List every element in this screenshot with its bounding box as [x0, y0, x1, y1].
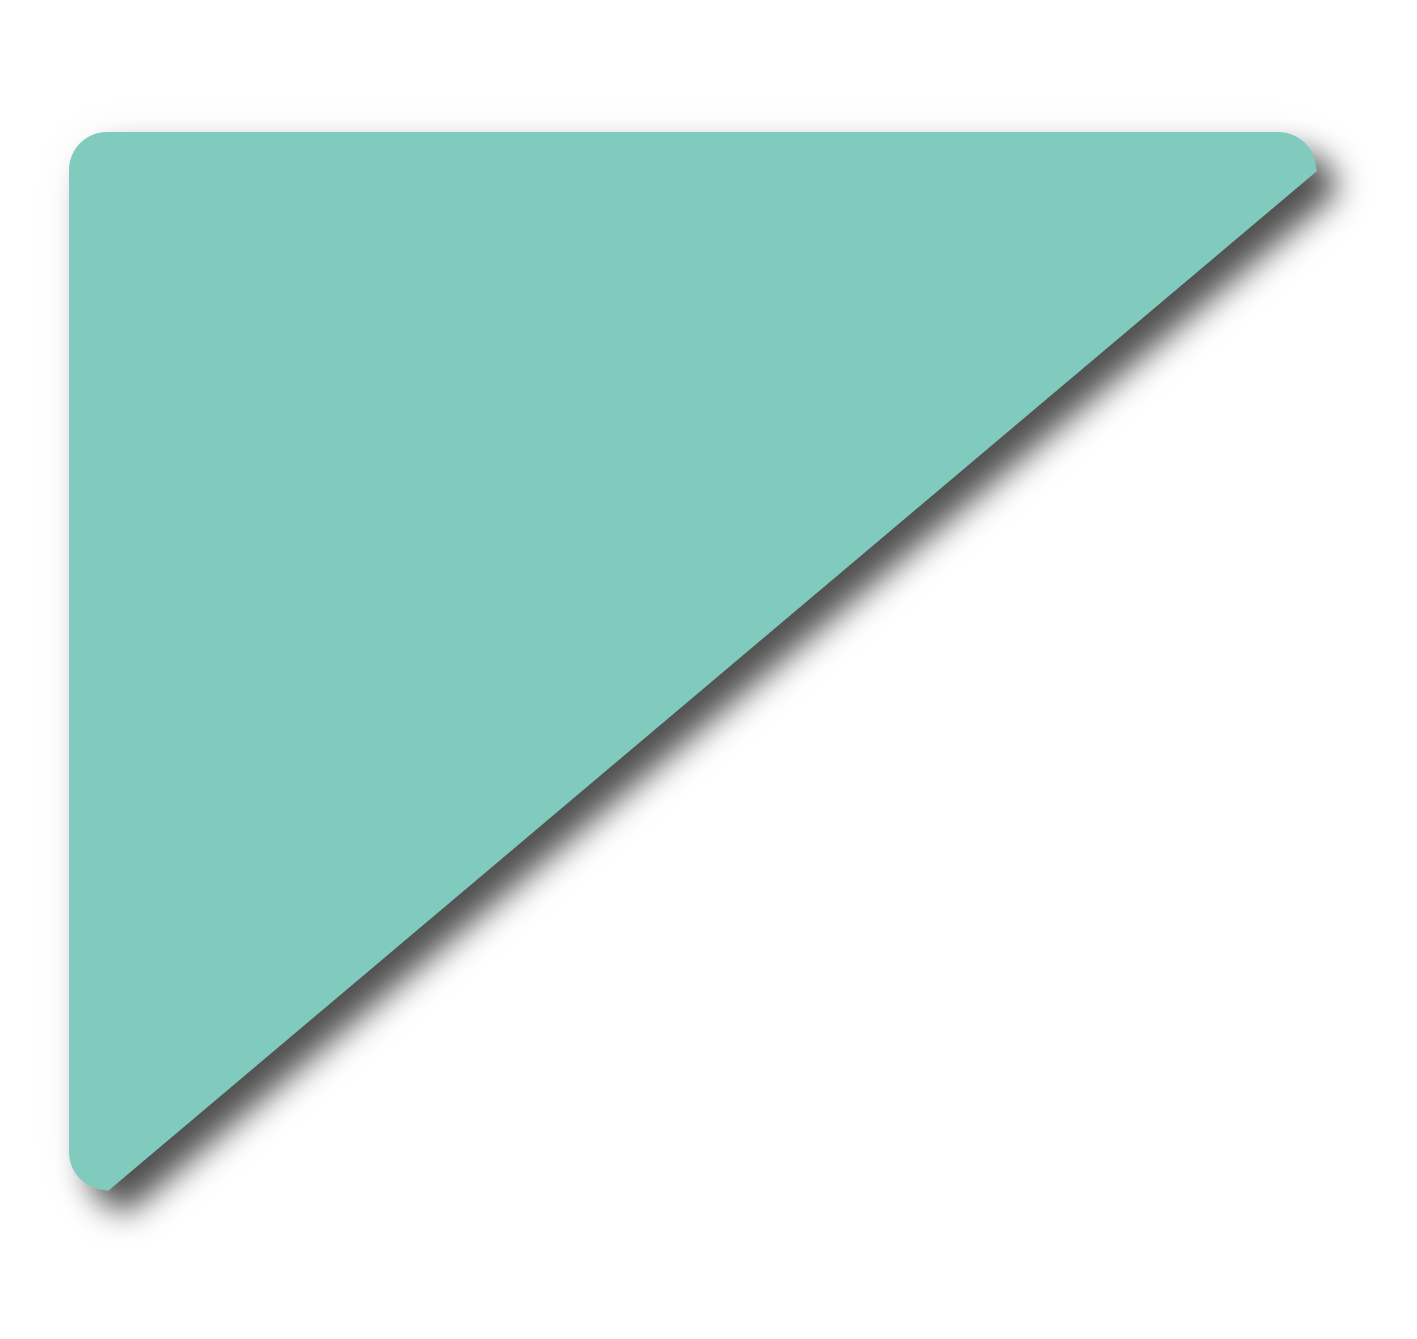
- panel: teal rounded triangle with drop shadow: [69, 132, 1317, 1191]
